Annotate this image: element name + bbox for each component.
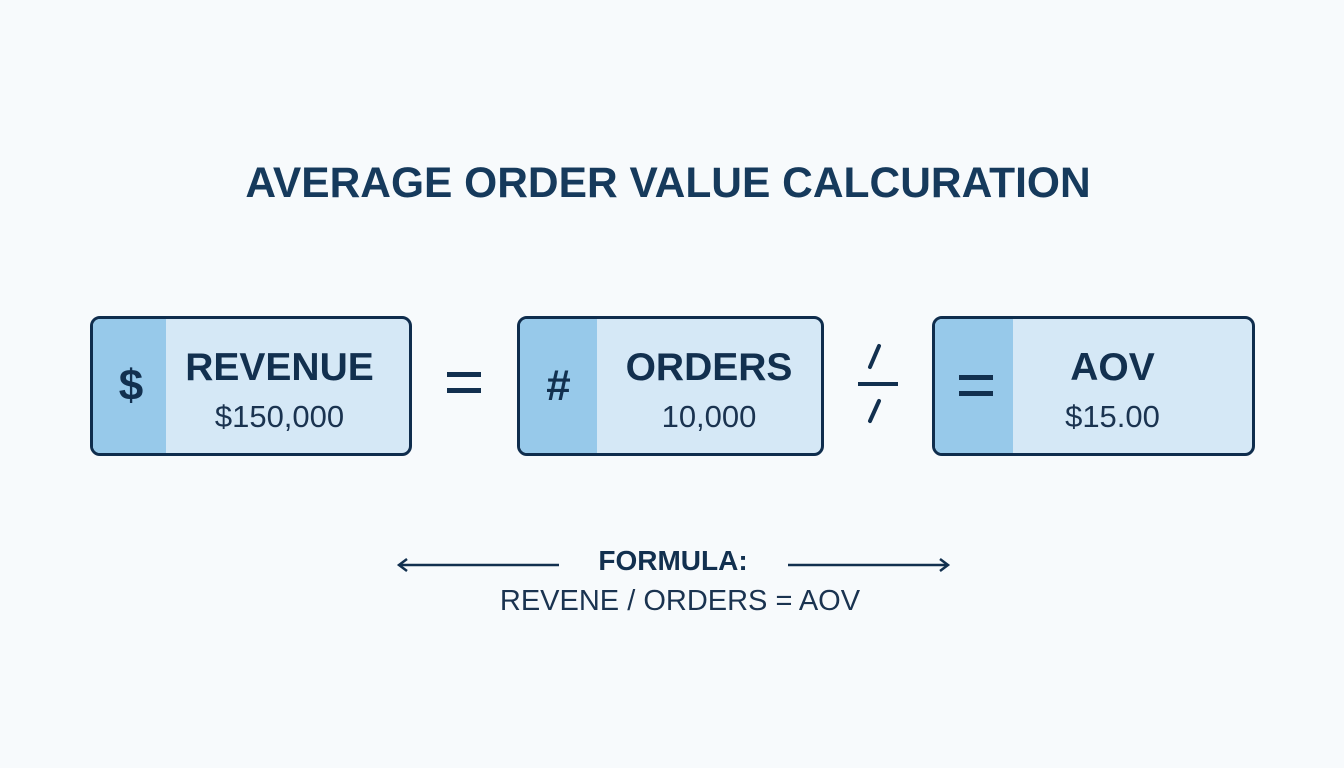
orders value: 10,000 [662, 399, 756, 434]
formula text: REVENE / ORDERS = AOV [500, 585, 860, 617]
formula heading: FORMULA: [598, 545, 748, 576]
equals sign [447, 372, 481, 393]
title: AVERAGE ORDER VALUE CALCURATION [245, 160, 1091, 207]
aov value: $15.00 [1065, 399, 1160, 434]
orders label: ORDERS [626, 346, 792, 389]
icon: dollar: $ [119, 361, 143, 410]
revenue label: REVENUE [185, 346, 374, 389]
aov label: AOV [1070, 346, 1155, 389]
revenue value: $150,000 [215, 399, 344, 434]
panel: orders [517, 316, 824, 456]
arrow: right [788, 558, 950, 572]
icon: hash: # [546, 361, 571, 410]
panel: aov [932, 316, 1255, 456]
arrow: left [397, 558, 559, 572]
icon: equals [959, 375, 993, 396]
panel: revenue [90, 316, 412, 456]
divide sign [858, 344, 898, 424]
